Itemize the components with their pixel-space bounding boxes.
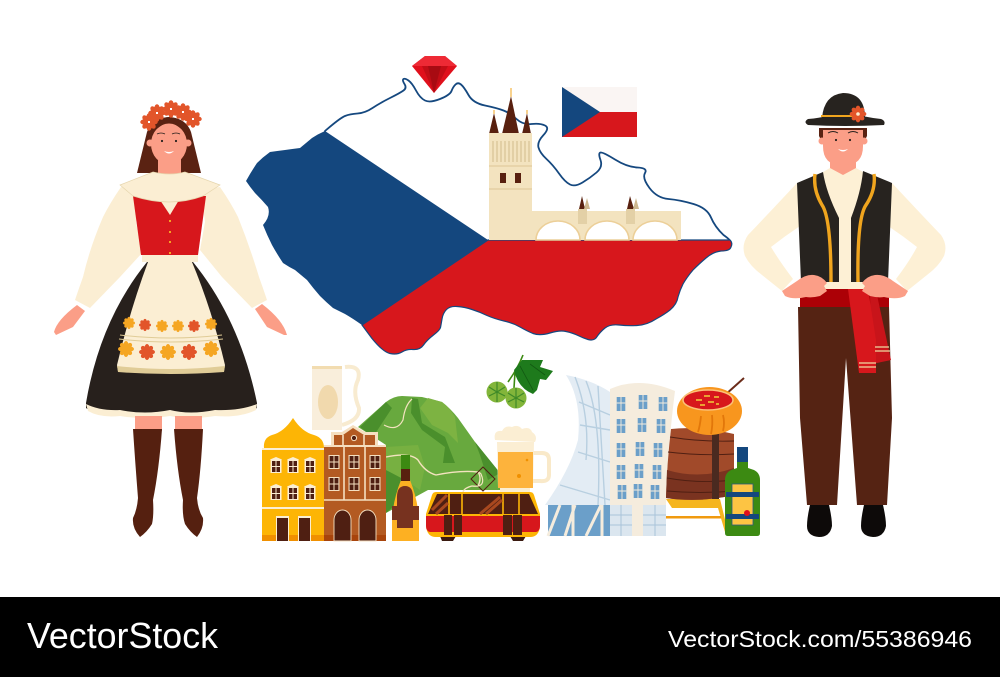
beer bottle xyxy=(392,455,419,541)
shirt xyxy=(815,168,870,289)
hair xyxy=(137,117,201,173)
yellow townhouse xyxy=(262,418,324,541)
apron xyxy=(117,262,225,374)
collar xyxy=(120,172,220,202)
bodice buttons xyxy=(169,220,171,254)
trousers xyxy=(798,307,892,505)
face xyxy=(146,117,192,164)
tram body xyxy=(426,492,540,537)
bridge deck with arches xyxy=(532,211,681,240)
tower spires xyxy=(489,88,531,134)
shoes xyxy=(807,505,886,537)
wheels xyxy=(440,536,526,541)
beer mug xyxy=(495,426,549,493)
head xyxy=(818,128,868,165)
sash belt xyxy=(800,289,889,307)
sash tails xyxy=(848,289,891,373)
landmark: Dancing House glass tower xyxy=(545,375,610,536)
vest left panel xyxy=(797,172,839,282)
flower crown xyxy=(140,100,202,131)
hands on hips xyxy=(782,275,908,298)
green liqueur bottle xyxy=(725,447,760,536)
beer stein xyxy=(312,366,359,430)
apron flowers xyxy=(118,317,219,360)
map: red southern area xyxy=(362,240,732,354)
tower body xyxy=(489,133,532,240)
boots xyxy=(133,429,203,537)
neck xyxy=(830,158,856,180)
right sleeve xyxy=(888,183,945,291)
footer bar xyxy=(0,597,1000,677)
overhead wire diamond xyxy=(471,467,495,491)
landmark: Dancing House cream tower xyxy=(610,383,675,536)
hop plant xyxy=(486,355,553,408)
goulash bread bowl xyxy=(677,378,744,435)
bodice xyxy=(133,196,206,255)
footer logo text: VectorStock xyxy=(27,615,219,656)
waistband xyxy=(142,255,198,262)
skirt hem xyxy=(86,404,257,418)
left sleeve xyxy=(744,183,800,291)
left hand xyxy=(54,305,85,335)
neck xyxy=(158,158,181,176)
icon: ruby gem xyxy=(412,56,457,93)
skirt xyxy=(86,262,257,417)
hat xyxy=(806,93,885,126)
vest right panel xyxy=(851,171,892,282)
landmark: Charles Bridge tower xyxy=(489,88,681,240)
flag of the Czech Republic xyxy=(562,87,637,137)
map: blue western triangle xyxy=(246,131,488,325)
left sleeve xyxy=(75,187,142,308)
footer image id text: VectorStock.com/55386946 xyxy=(668,626,972,652)
man in traditional costume xyxy=(744,93,945,537)
vest gold trim xyxy=(815,174,874,282)
bridge statues xyxy=(578,196,639,224)
brown townhouse xyxy=(324,425,386,541)
right hand xyxy=(255,304,287,335)
country map with flag colours xyxy=(246,79,732,354)
tram xyxy=(426,467,540,541)
right sleeve xyxy=(200,187,267,308)
woman in traditional costume xyxy=(54,100,287,537)
legs xyxy=(135,416,202,431)
barrel on yellow stand xyxy=(666,428,734,532)
landmark: green hill with trail xyxy=(358,396,500,513)
map: white northern area with river border xyxy=(325,79,731,243)
